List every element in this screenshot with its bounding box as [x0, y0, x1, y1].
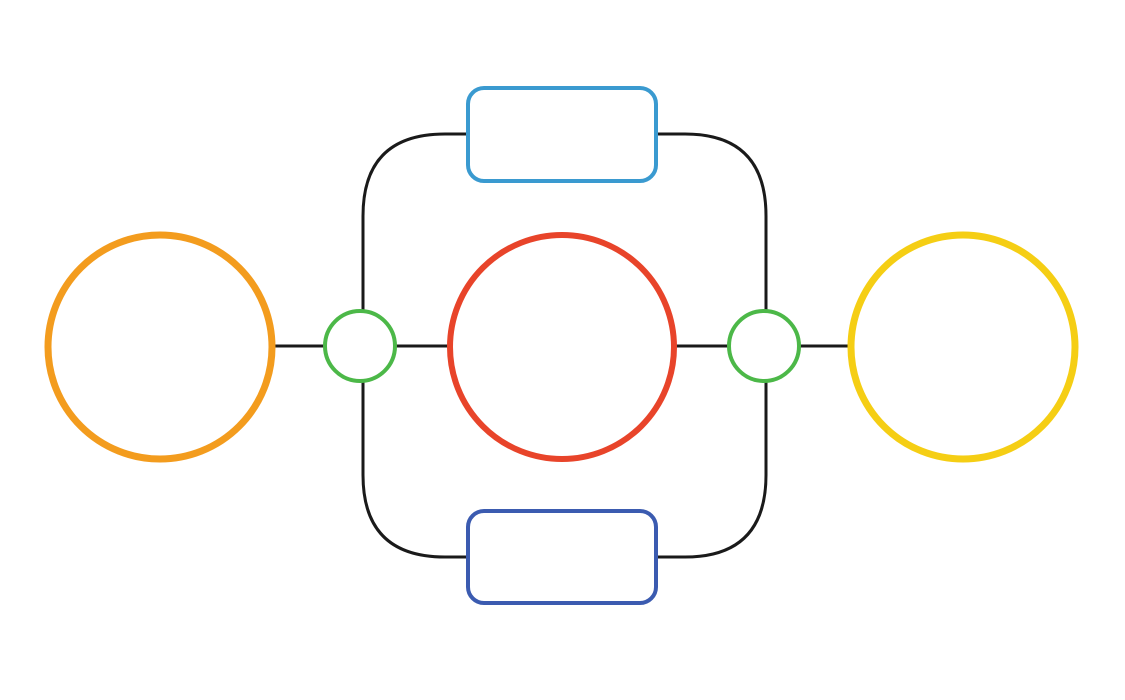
box: bottom navy: [468, 511, 656, 603]
node: green right: [729, 311, 799, 381]
circle: yellow right: [851, 235, 1075, 459]
box: top blue: [468, 88, 656, 181]
connectors: [273, 344, 850, 348]
frame: black rounded loop: [363, 134, 766, 557]
circle: orange left: [48, 235, 272, 459]
node: green left: [325, 311, 395, 381]
circle: red center: [450, 235, 674, 459]
